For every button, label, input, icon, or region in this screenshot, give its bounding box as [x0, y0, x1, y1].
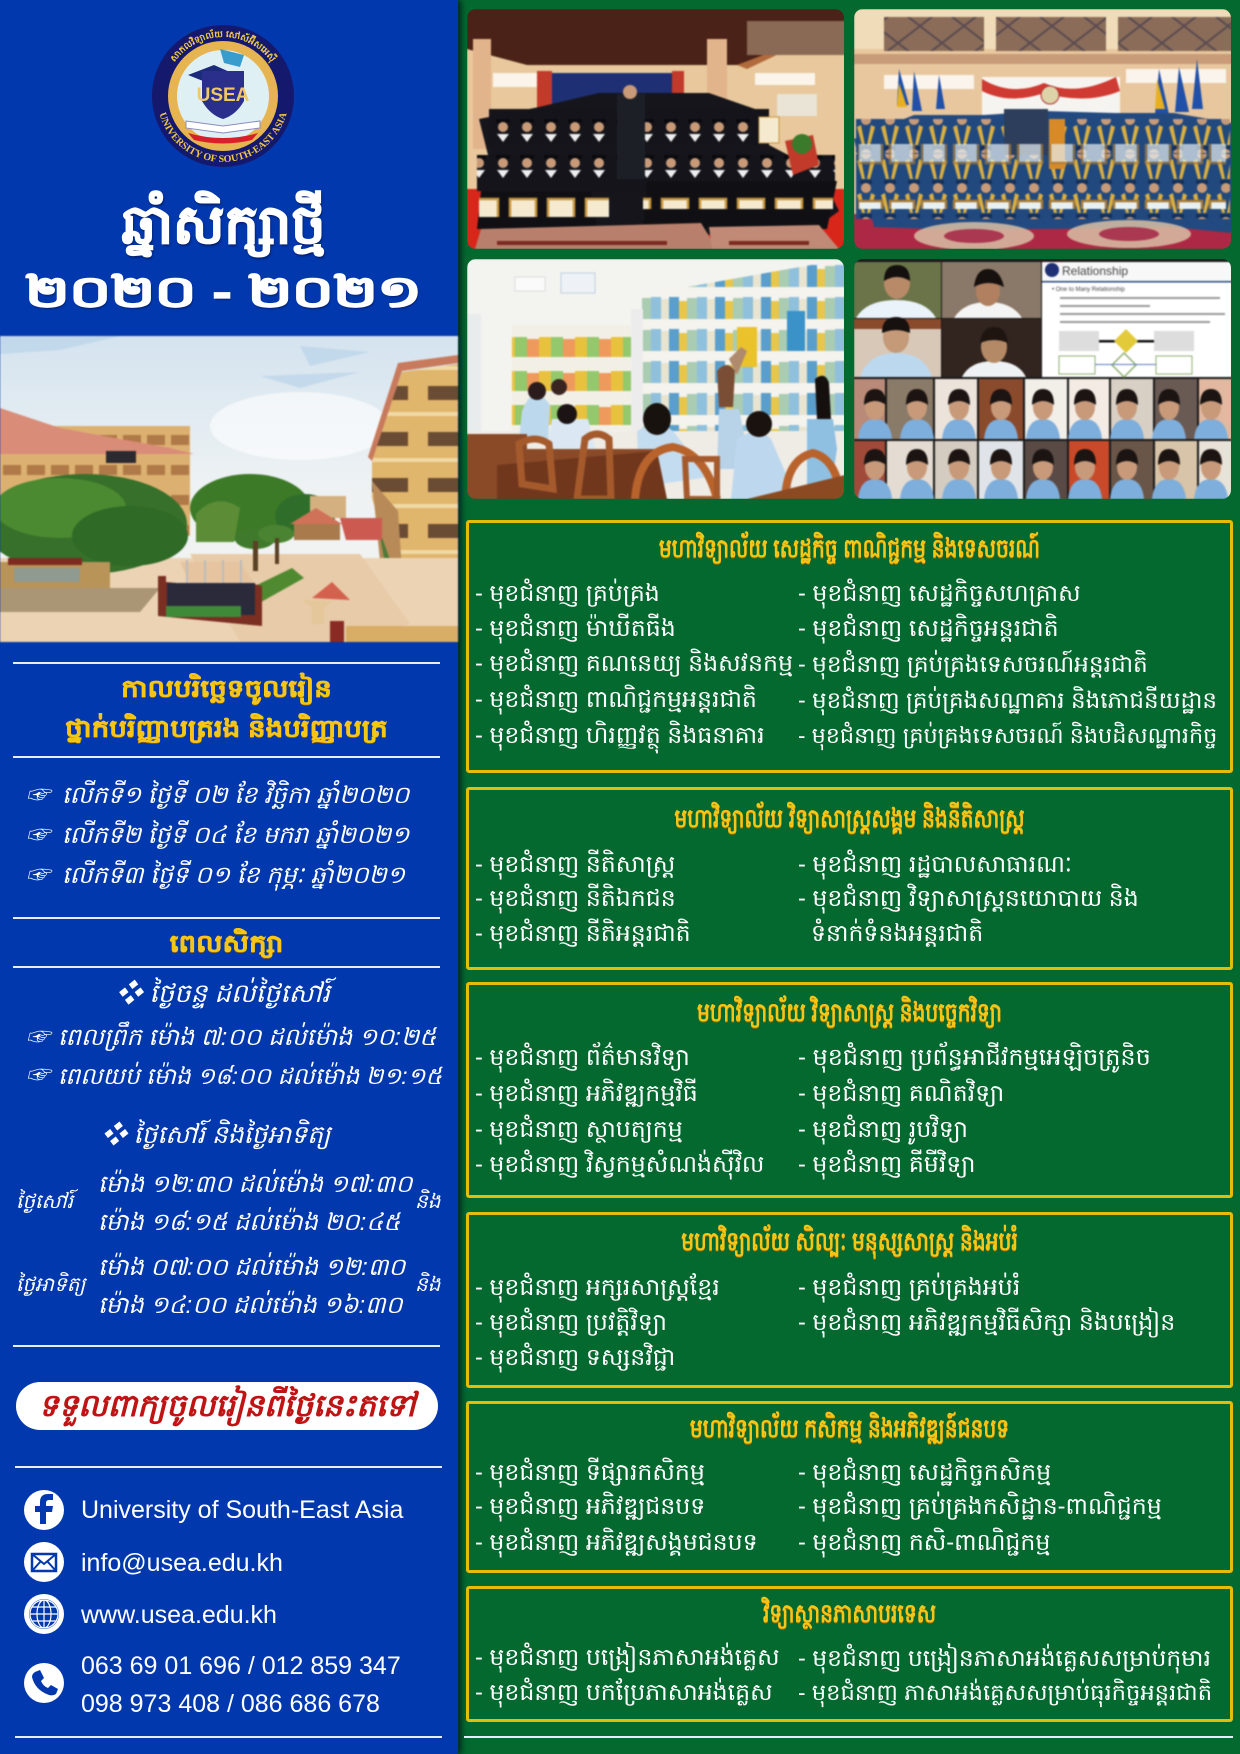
icon: university logo: សាកលវិទ្យាល័យ សៅស៍អ៊ីសអេស៊ី — [171, 29, 278, 64]
text: weekend sessions: ម៉ោង ១៤:០០ ដល់ម៉ោង ១៦:៣០ — [98, 1292, 403, 1319]
panel: left blue sidebar — [0, 0, 458, 1754]
photo: graduation group black gowns — [467, 9, 844, 249]
panel: faculty of social sciences and law — [466, 787, 1233, 970]
text: weekend sessions: ម៉ោង ០៧:០០ ដល់ម៉ោង ១២:៣០ — [98, 1254, 405, 1281]
list: majors: - មុខជំនាញ គ្រប់គ្រងសណ្ឋាគារ និងភោជនីយដ្ឋាន — [798, 687, 1217, 713]
list: majors: - មុខជំនាញ ប្រវត្តិវិទ្យា — [475, 1310, 667, 1336]
list: majors: - មុខជំនាញ ព័ត៌មានវិទ្យា — [475, 1045, 690, 1071]
list: majors: - មុខជំនាញ រដ្ឋបាលសាធារណៈ — [798, 852, 1072, 878]
text: weekend sessions: ❖ ថ្ងៃសៅរ៍ និងថ្ងៃអាទិត្យ — [102, 1121, 330, 1149]
list: majors: - មុខជំនាញ នីតិអន្តរជាតិ — [475, 921, 691, 947]
panel: faculty of arts, humanities and education — [466, 1212, 1233, 1388]
list: majors: - មុខជំនាញ គ្រប់គ្រងកសិដ្ឋាន-ពាណិជ្ជកម្ម — [798, 1494, 1162, 1520]
heading: enrolment dates: ថ្នាក់បរិញ្ញាបត្ររង និងបរិញ្ញាបត្រ — [65, 716, 388, 742]
list: majors: - មុខជំនាញ គ្រប់គ្រង — [475, 581, 660, 607]
list: majors: - មុខជំនាញ បង្រៀនភាសាអង់គ្លេសសម្រាប់កុមារ — [798, 1645, 1211, 1671]
list: majors: - មុខជំនាញ អភិវឌ្ឍកម្មវិធីសិក្សា និងបង្រៀន — [798, 1310, 1175, 1336]
list: majors — [475, 1458, 1162, 1558]
list: majors: - មុខជំនាញ បង្រៀនភាសាអង់គ្លេស — [475, 1645, 780, 1671]
heading: faculty title: មហាវិទ្យាល័យ វិទ្យាសាស្ត្រសង្គម និងនីតិសាស្ត្រ — [674, 803, 1025, 833]
list: majors: - មុខជំនាញ កសិ-ពាណិជ្ជកម្ម — [798, 1530, 1050, 1556]
icon: university logo: USEA — [197, 85, 250, 106]
text: phone numbers: 098 973 408 / 086 686 678 — [81, 1690, 380, 1718]
list: majors: - មុខជំនាញ គណនេយ្យ និងសវនកម្ម — [475, 651, 793, 677]
list: majors: - មុខជំនាញ សេដ្ឋកិច្ចសហគ្រាស — [798, 581, 1081, 607]
list: enrolment rounds: ☞ — [26, 862, 50, 889]
list: majors: - មុខជំនាញ អភិវឌ្ឍជនបទ — [475, 1494, 705, 1520]
icon: globe — [24, 1594, 64, 1634]
list: majors: - មុខជំនាញ ពាណិជ្ជកម្មអន្តរជាតិ — [475, 687, 757, 713]
list: majors — [475, 1642, 1212, 1708]
list: majors: - មុខជំនាញ ទីផ្សារកសិកម្ម — [475, 1460, 705, 1486]
text: weekend sessions: និង — [415, 1274, 440, 1296]
heading: faculty title: មហាវិទ្យាល័យ សិល្បៈ មនុស្សសាស្ត្រ និងអប់រំ — [681, 1226, 1018, 1256]
list: majors — [475, 1042, 1151, 1180]
list: majors: - មុខជំនាញ ម៉ាឃីតធីង — [475, 616, 676, 642]
text: website: www.usea.edu.kh — [81, 1601, 277, 1629]
photo: library — [467, 259, 844, 499]
photo: online class video grid: Relationship — [1062, 264, 1128, 278]
panel: faculty of economics, commerce and tourism — [466, 520, 1233, 773]
title: academic year: ឆ្នាំសិក្សាថ្មី — [122, 195, 325, 255]
text: weekday sessions: ពេលយប់ ម៉ោង ១៨:០០ ដល់ម៉ោង ២១:១៥ — [58, 1063, 442, 1089]
list: majors — [475, 1272, 1175, 1372]
text: weekend sessions: ម៉ោង ១៨:១៥ ដល់ម៉ោង ២០:៤៥ — [98, 1209, 400, 1236]
list: enrolment rounds: ☞ — [26, 782, 50, 809]
list: majors: - មុខជំនាញ អភិវឌ្ឍសង្គមជនបទ — [475, 1530, 758, 1556]
list: majors: - មុខជំនាញ គ្រប់គ្រងទេសចរណ៍ និងបដិសណ្ឋារកិច្ច — [798, 723, 1217, 748]
list: enrolment rounds: លើកទី១ ថ្ងៃទី ០២ ខែ វិច្ឆិកា ឆ្នាំ២០២០ — [62, 782, 409, 809]
list: majors: - មុខជំនាញ ប្រព័ន្ធអាជីវកម្មអេឡិចត្រូនិច — [798, 1044, 1151, 1071]
heading: enrolment dates: កាលបរិច្ឆេទចូលរៀន — [121, 676, 332, 702]
list: enrolment rounds — [26, 780, 410, 891]
list: majors: - មុខជំនាញ បកប្រែភាសាអង់គ្លេស — [475, 1680, 773, 1706]
text: weekday sessions: ☞ — [26, 1062, 50, 1089]
list: enrolment rounds: លើកទី៣ ថ្ងៃទី ០១ ខែ កុម្ភៈ ឆ្នាំ២០២១ — [62, 862, 405, 889]
text: weekend sessions: ថ្ងៃសៅរ៍ — [16, 1191, 73, 1213]
text: weekend sessions: ថ្ងៃអាទិត្យ — [16, 1274, 85, 1296]
heading: institute title: វិទ្យាស្ថានភាសាបរទេស — [763, 1598, 936, 1628]
list: majors — [475, 578, 1217, 754]
list: majors: - មុខជំនាញ គីមីវិទ្យា — [798, 1152, 975, 1178]
text: weekend sessions: ម៉ោង ១២:៣០ ដល់ម៉ោង ១៧:៣០ — [98, 1171, 412, 1198]
list: majors: - មុខជំនាញ គ្រប់គ្រងអប់រំ — [798, 1275, 1020, 1301]
list: majors: - មុខជំនាញ វិស្វកម្មសំណង់ស៊ីវិល — [475, 1152, 764, 1178]
icon: email — [24, 1542, 64, 1582]
list: majors: - មុខជំនាញ ទស្សនវិជ្ជា — [475, 1345, 675, 1371]
text: weekday sessions — [26, 977, 443, 1089]
text: weekday sessions: ❖ ថ្ងៃចន្ទ ដល់ថ្ងៃសៅរ៍ — [116, 978, 330, 1008]
list: majors: - មុខជំនាញ ស្ថាបត្យកម្ម — [475, 1117, 683, 1143]
text: phone numbers: 063 69 01 696 / 012 859 347 — [81, 1652, 401, 1680]
text: weekend sessions — [16, 1119, 440, 1319]
list: majors: - មុខជំនាញ អភិវឌ្ឍកម្មវិធី — [475, 1081, 698, 1107]
list: majors: - មុខជំនាញ អក្សរសាស្ត្រខ្មែរ — [475, 1275, 720, 1301]
panel: faculty of science and technology — [466, 982, 1233, 1198]
list: enrolment rounds: ☞ — [26, 822, 50, 849]
icon: facebook — [24, 1490, 64, 1530]
text: phone numbers — [81, 1652, 401, 1718]
photo: campus — [0, 335, 459, 643]
panel: institute of foreign languages — [466, 1586, 1233, 1722]
text: weekday sessions: ពេលព្រឹក ម៉ោង ៧:០០ ដល់ម៉ោង ១០:២៥ — [58, 1024, 436, 1051]
list: majors: - មុខជំនាញ សេដ្ឋកិច្ចកសិកម្ម — [798, 1460, 1051, 1486]
photo: online class video grid: • One to Many Relationship — [1052, 287, 1125, 293]
heading: faculty title: មហាវិទ្យាល័យ វិទ្យាសាស្ត្រ និងបច្ចេកវិទ្យា — [697, 997, 1002, 1027]
list: majors: - មុខជំនាញ វិទ្យាសាស្ត្រនយោបាយ និង — [798, 886, 1139, 912]
list: majors: - មុខជំនាញ គណិតវិទ្យា — [798, 1081, 1004, 1107]
text: weekday sessions: ☞ — [26, 1024, 50, 1051]
list: majors: - មុខជំនាញ ហិរញ្ញវត្ថុ និងធនាគារ — [475, 723, 765, 749]
list: majors: - មុខជំនាញ ភាសាអង់គ្លេសសម្រាប់ធុរកិច្ចអន្តរជាតិ — [798, 1680, 1212, 1705]
callout: applications open pill — [16, 1382, 438, 1430]
icon: university logo — [152, 25, 294, 167]
list: majors: - មុខជំនាញ សេដ្ឋកិច្ចអន្តរជាតិ — [798, 616, 1059, 642]
panel: faculty of agriculture and rural development — [466, 1401, 1233, 1573]
list: majors: - មុខជំនាញ នីតិឯកជន — [475, 886, 676, 912]
list: enrolment rounds: លើកទី២ ថ្ងៃទី ០៤ ខែ មករា ឆ្នាំ២០២១ — [62, 822, 409, 849]
text: email: info@usea.edu.kh — [81, 1549, 283, 1577]
heading: enrolment dates — [13, 662, 440, 758]
heading: faculty title: មហាវិទ្យាល័យ សេដ្ឋកិច្ច ពាណិជ្ជកម្ម និងទេសចរណ៍ — [659, 533, 1040, 563]
list: majors: - មុខជំនាញ នីតិសាស្ត្រ — [475, 852, 675, 878]
list: majors — [475, 850, 1139, 948]
icon: phone — [24, 1663, 64, 1703]
list: majors: - មុខជំនាញ គ្រប់គ្រងទេសចរណ៍អន្តរជាតិ — [798, 651, 1148, 677]
icon: university logo: UNIVERSITY OF SOUTH-EAST ASIA — [160, 112, 287, 162]
heading: study time: ពេលសិក្សា — [170, 931, 283, 957]
callout: applications open pill: ទទួលពាក្យចូលរៀនពីថ្ងៃនេះតទៅ — [39, 1388, 415, 1423]
photo: graduation group blue and gold gowns — [854, 9, 1231, 249]
title: year range: ២០២០ - ២០២១ — [25, 268, 422, 316]
list: majors: - មុខជំនាញ រូបវិទ្យា — [798, 1117, 968, 1143]
text: facebook name: University of South-East Asia — [81, 1496, 403, 1524]
list: majors: ទំនាក់ទំនងអន្តរជាតិ — [811, 921, 983, 947]
photo: online class video grid — [854, 259, 1231, 499]
text: weekend sessions: និង — [415, 1191, 440, 1213]
heading: faculty title: មហាវិទ្យាល័យ កសិកម្ម និងអភិវឌ្ឍន៍ជនបទ — [690, 1413, 1009, 1443]
